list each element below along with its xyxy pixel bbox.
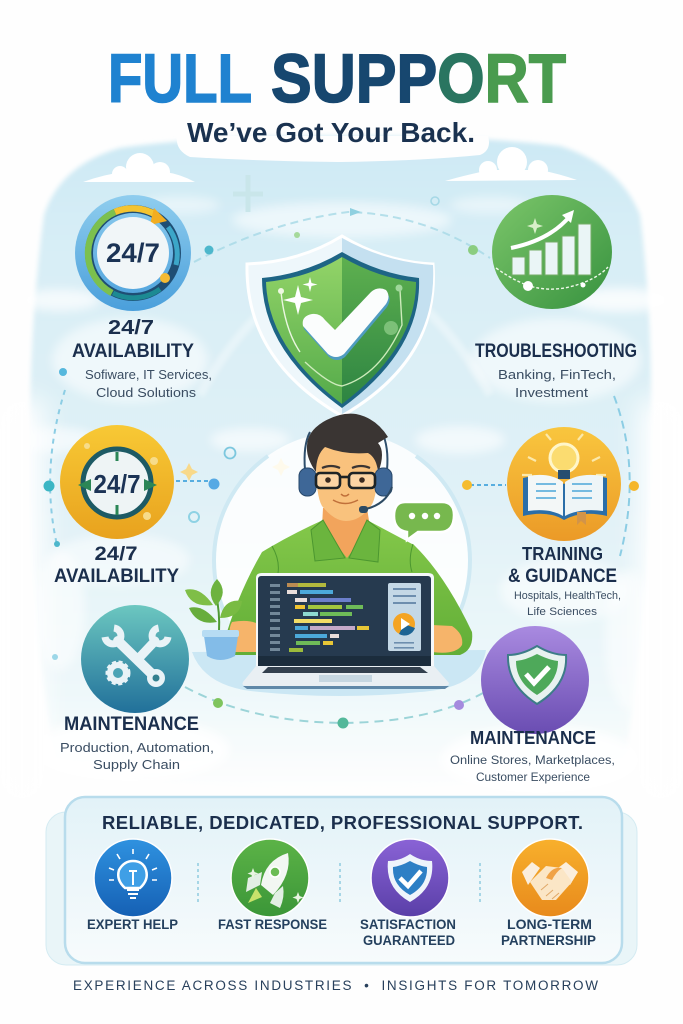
panel: 24/7 availability (blue) [72, 195, 212, 400]
icon: book and bulb [507, 427, 621, 541]
panel: maintenance (purple) [450, 626, 615, 784]
shirt [227, 520, 472, 655]
clouds near top [83, 147, 577, 182]
icon: purple shield [481, 626, 589, 734]
icon: clock: 24/7 [94, 469, 140, 499]
caption: Hospitals, HealthTech, [514, 590, 621, 602]
decorative rings and dashed orbit [50, 212, 630, 723]
glasses [316, 473, 375, 488]
panel: maintenance (teal) [60, 605, 214, 772]
icon: light bulb [94, 839, 172, 917]
panel: 24/7 availability (yellow) [54, 425, 179, 587]
subtitle: We’ve Got Your Back. [187, 117, 475, 148]
title [108, 40, 566, 117]
heading: TROUBLESHOOTING [475, 341, 637, 362]
label: SATISFACTION [360, 917, 456, 932]
keyboard [262, 667, 428, 673]
panel heading: RELIABLE, DEDICATED, PROFESSIONAL SUPPORT. [102, 812, 583, 833]
head [316, 442, 377, 521]
caption: Life Sciences [527, 606, 598, 618]
background: pale watercolor sky [0, 136, 683, 800]
title word FULL: FULL [108, 40, 252, 117]
speech bubble [394, 502, 454, 540]
caption: Online Stores, Marketplaces, [450, 755, 615, 767]
panel: reliable support [46, 797, 637, 965]
nose and smile [333, 494, 358, 504]
icon: growth chart [492, 195, 612, 309]
caption: Banking, FinTech, [498, 368, 616, 382]
panel: troubleshooting (green) [475, 195, 637, 400]
orbit dots [44, 175, 639, 728]
label: GUARANTEED [363, 933, 455, 948]
icon: tools [81, 605, 189, 713]
laptop base [242, 666, 449, 686]
caption: Cloud Solutions [96, 386, 196, 400]
hair [307, 414, 388, 473]
title word SUPPORT: SUPPORT [271, 40, 566, 117]
panel: training and guidance (orange) [507, 427, 621, 618]
heading: AVAILABILITY [54, 566, 179, 587]
laptop [242, 573, 449, 689]
icon: 24/7 ring: 24/7 [106, 238, 160, 268]
heading: 24/7 [108, 317, 154, 339]
label: LONG-TERM [507, 917, 592, 932]
support agent at desk [185, 414, 486, 696]
icon: clock [60, 425, 174, 539]
icon: rocket [231, 839, 309, 917]
label: PARTNERSHIP [501, 933, 596, 948]
label: FAST RESPONSE [218, 917, 327, 932]
heading: AVAILABILITY [72, 341, 194, 362]
heading: TRAINING [522, 544, 603, 564]
caption: Production, Automation, [60, 741, 214, 755]
side panel with chart [388, 583, 421, 651]
hands [229, 621, 462, 653]
collar [311, 520, 380, 562]
dividers [198, 863, 480, 902]
label: EXPERT HELP [87, 917, 178, 932]
caption: Customer Experience [476, 772, 590, 784]
icon: shield check [371, 839, 449, 917]
neck [322, 508, 370, 558]
subtitle white banner [177, 136, 489, 162]
icon: handshake [511, 839, 589, 917]
desk shadow [192, 650, 486, 696]
caption: Supply Chain [93, 758, 180, 772]
microphone [359, 487, 392, 513]
caption: Investment [515, 386, 589, 400]
potted plant [185, 579, 242, 660]
icon: 24/7 ring [75, 195, 191, 311]
heading: MAINTENANCE [470, 728, 596, 748]
caption: Sofiware, IT Services, [85, 368, 212, 382]
central shield with check mark [247, 236, 433, 416]
eyebrows [322, 466, 370, 468]
center white halo [214, 432, 470, 688]
footer tagline: EXPERIENCE ACROSS INDUSTRIES • INSIGHTS FOR TOMORROW [73, 978, 598, 993]
shirt folds [272, 544, 413, 573]
heading: & GUIDANCE [508, 566, 617, 587]
heading: 24/7 [94, 544, 138, 565]
headset band [305, 432, 387, 470]
code lines [270, 583, 369, 652]
ear cups [299, 468, 392, 496]
heading: MAINTENANCE [64, 714, 199, 735]
